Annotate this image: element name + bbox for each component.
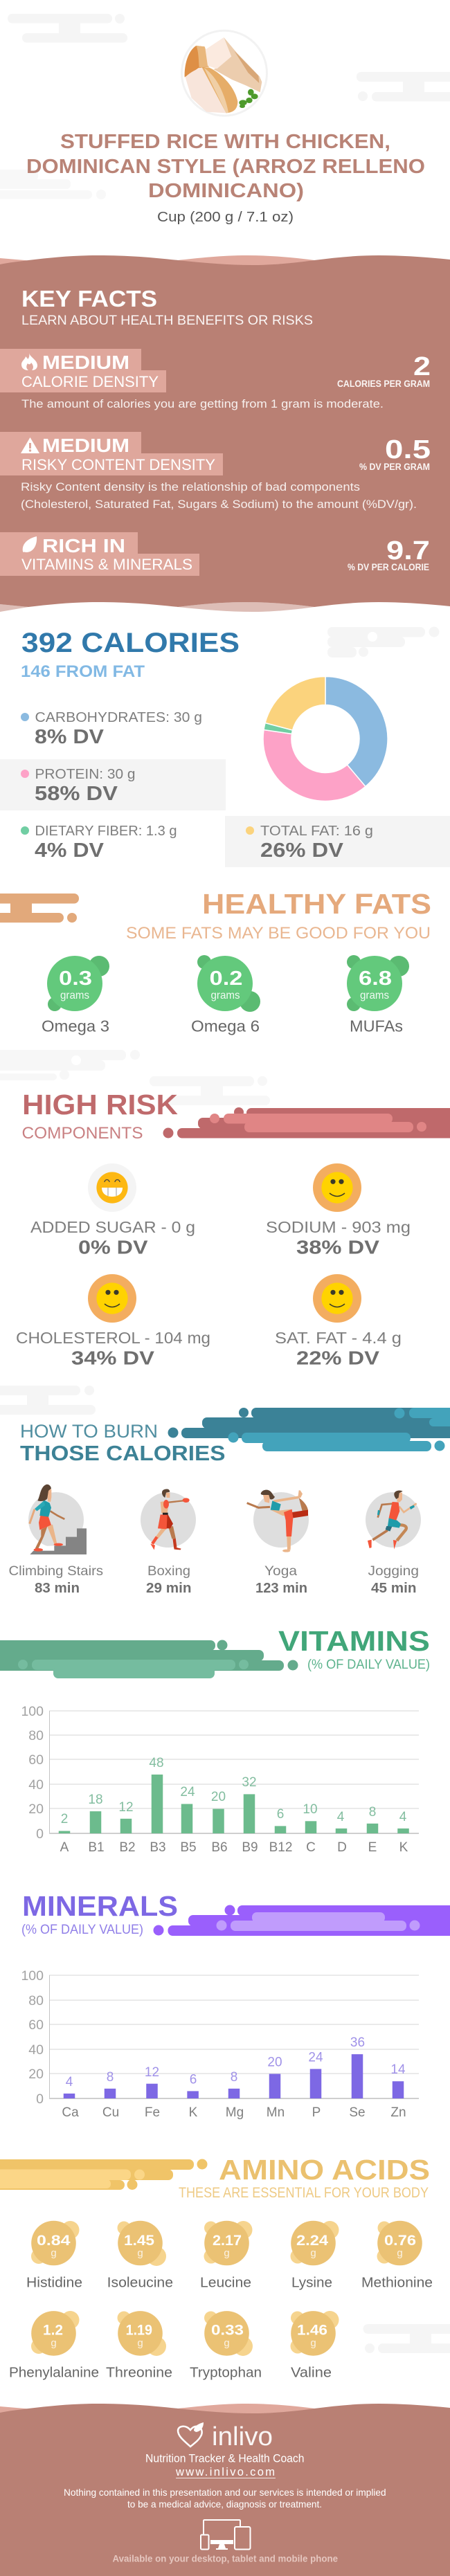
heading: minerals: MINERALS	[22, 1890, 178, 1922]
amino: phenylalanine: Phenylalanine	[9, 2366, 99, 2381]
heading: amino acids	[179, 2154, 430, 2201]
amino: methionine: 0.76	[384, 2232, 416, 2249]
bar chart: vitamins: B12	[269, 1840, 292, 1855]
bar chart: vitamins: 80	[28, 1728, 44, 1743]
bar chart: vitamins: 48	[149, 1756, 164, 1770]
fact: calorie density: The amount of calories you are getting from 1 gram is moderate.	[21, 398, 384, 410]
legend: dietary fiber: 4% DV	[35, 840, 105, 862]
heading: key facts: KEY FACTS	[21, 286, 157, 311]
risk: sodium: SODIUM - 903 mg	[266, 1218, 411, 1236]
bar chart: vitamins: D	[337, 1840, 347, 1855]
bar chart: vitamins: 32	[242, 1775, 257, 1790]
risk: cholesterol: CHOLESTEROL - 104 mg	[16, 1329, 210, 1347]
logo: inlivo: inlivo	[212, 2422, 273, 2451]
bar chart: minerals: Zn	[390, 2105, 406, 2120]
heading: vitamins: (% OF DAILY VALUE)	[307, 1658, 430, 1672]
amino: leucine: 2.17	[213, 2232, 242, 2249]
panel: key facts	[0, 255, 450, 612]
amino: tryptophan: Tryptophan	[190, 2366, 262, 2381]
tagline and website: www.inlivo.com	[175, 2466, 275, 2478]
food photo: chicken	[181, 30, 267, 116]
activity: climbing stairs	[8, 1485, 103, 1596]
bar chart: vitamins: 12	[118, 1800, 134, 1815]
panel: vitamins	[0, 1625, 430, 1855]
icon: leaf	[23, 536, 37, 552]
amino: leucine: g	[224, 2247, 230, 2259]
fact: calorie density: 2	[413, 352, 431, 381]
amino: valine: g	[310, 2337, 316, 2349]
amino: lysine: g	[310, 2247, 316, 2259]
amino: valine: 1.46	[297, 2322, 327, 2339]
icon: flame	[21, 353, 37, 370]
bar chart: minerals	[21, 1968, 419, 2120]
bar chart: minerals: 100	[21, 1968, 44, 1984]
bar chart: minerals: 12	[145, 2065, 159, 2080]
fact: risky content density: MEDIUM	[42, 435, 129, 456]
bar chart: vitamins	[21, 1704, 419, 1855]
bar chart: minerals: Mg	[226, 2105, 244, 2120]
disclaimer	[64, 2487, 386, 2510]
fact: rich in vitamins and minerals: VITAMINS & MINERALS	[21, 556, 192, 573]
bar chart: minerals: Mn	[267, 2105, 285, 2120]
bar chart: vitamins: C	[306, 1840, 316, 1855]
bar chart: vitamins: B2	[119, 1840, 136, 1855]
amino: histidine: Histidine	[26, 2276, 82, 2291]
panel: healthy fats	[0, 888, 431, 1035]
risk: saturated fat: SAT. FAT - 4.4 g	[275, 1329, 402, 1347]
decorative bars: amino acids	[0, 2159, 208, 2190]
disclaimer: Nothing contained in this presentation and our services is intended or implied	[64, 2487, 386, 2498]
bar chart: vitamins: E	[368, 1840, 377, 1855]
activity: jogging: Jogging	[368, 1563, 419, 1579]
badge: omega 3: grams	[60, 990, 89, 1001]
fact: risky content density	[0, 432, 431, 511]
heading: vitamins	[278, 1625, 430, 1672]
bar chart: vitamins: 10	[303, 1802, 318, 1817]
activity: jogging: 45 min	[371, 1581, 417, 1596]
bar chart: vitamins: 2	[61, 1812, 68, 1826]
bar chart: minerals: Ca	[62, 2105, 79, 2120]
bar chart: minerals: Fe	[145, 2105, 160, 2120]
bar chart: vitamins: 0	[36, 1826, 44, 1842]
fact: risky content density: RISKY CONTENT DENSITY	[21, 456, 215, 473]
badge: mufas: MUFAs	[350, 1017, 403, 1035]
badge: omega 3: Omega 3	[42, 1017, 109, 1035]
bar chart: vitamins: 60	[28, 1752, 44, 1768]
amino: histidine: g	[51, 2247, 57, 2259]
heading: amino acids: AMINO ACIDS	[219, 2154, 430, 2186]
bar chart: vitamins: B5	[180, 1840, 197, 1855]
heading: calories: 146 FROM FAT	[21, 662, 145, 681]
bar chart: minerals: 0	[36, 2092, 44, 2107]
fact: calorie density: CALORIE DENSITY	[21, 373, 159, 390]
amino: lysine: Lysine	[291, 2276, 332, 2291]
bar chart: vitamins: 18	[88, 1793, 103, 1807]
heading: key facts: LEARN ABOUT HEALTH BENEFITS OR RISKS	[21, 313, 313, 328]
legend: protein: PROTEIN: 30 g	[35, 766, 136, 782]
title: DOMINICAN STYLE (ARROZ RELLENO	[26, 156, 425, 178]
bar chart: minerals: 14	[390, 2062, 406, 2077]
heading: how to burn: HOW TO BURN	[20, 1421, 158, 1442]
title: DOMINICANO)	[148, 180, 304, 202]
bar chart: vitamins: B3	[150, 1840, 166, 1855]
bar chart: minerals: 6	[190, 2072, 197, 2087]
bar chart: minerals: 8	[107, 2070, 114, 2085]
logo: inlivo	[178, 2422, 273, 2451]
legend: protein: 58% DV	[35, 783, 118, 805]
grey legend backgrounds	[0, 759, 450, 867]
fact: rich in vitamins and minerals: RICH IN	[42, 535, 125, 556]
decorative bars: high risk	[163, 1107, 450, 1138]
bar chart: minerals: 20	[267, 2056, 282, 2069]
amino: leucine: Leucine	[200, 2276, 251, 2291]
activity: boxing	[141, 1489, 196, 1596]
amino: isoleucine	[107, 2221, 173, 2291]
bar chart: minerals: K	[189, 2105, 198, 2120]
amino: phenylalanine: 1.2	[43, 2322, 63, 2339]
heading: healthy fats: SOME FATS MAY BE GOOD FOR YOU	[126, 924, 431, 943]
activity: boxing: Boxing	[147, 1563, 190, 1579]
amino: threonine: 1.19	[126, 2322, 152, 2339]
bar chart: vitamins: 20	[211, 1790, 226, 1804]
decorative bars: vitamins	[0, 1640, 298, 1678]
bar chart: vitamins: 24	[180, 1785, 195, 1799]
bar chart: vitamins: 8	[369, 1805, 376, 1820]
risk: added sugar: ADDED SUGAR - 0 g	[30, 1218, 195, 1236]
bar chart: vitamins: K	[399, 1840, 408, 1855]
bar chart: minerals: 24	[308, 2050, 323, 2065]
legend: total fat: 26% DV	[260, 840, 344, 862]
heading: healthy fats: HEALTHY FATS	[202, 888, 431, 920]
availability note: Available on your desktop, tablet and mobile phone	[112, 2553, 338, 2564]
header panel	[0, 14, 450, 225]
panel: minerals	[21, 1890, 450, 2120]
amino: histidine: 0.84	[37, 2232, 71, 2249]
fact: calorie density: MEDIUM	[42, 352, 129, 373]
amino: threonine: Threonine	[106, 2366, 172, 2381]
tagline and website	[145, 2453, 305, 2478]
badge: mufas: grams	[360, 990, 389, 1001]
bar chart: vitamins: 20	[28, 1802, 44, 1817]
risk: sodium	[266, 1163, 411, 1258]
fact: rich in vitamins and minerals: % DV PER CALORIE	[348, 562, 429, 572]
bar chart: minerals: 60	[28, 2017, 44, 2033]
activity: yoga: Yoga	[264, 1563, 297, 1579]
amino: methionine: Methionine	[361, 2276, 433, 2291]
amino: leucine	[200, 2221, 252, 2291]
bar chart: vitamins: 100	[21, 1704, 44, 1719]
badge: omega 6: Omega 6	[191, 1017, 260, 1035]
legend: carbohydrates: 8% DV	[35, 726, 105, 748]
bar chart: vitamins: B1	[88, 1840, 105, 1855]
badge: omega 6: grams	[210, 990, 240, 1001]
amino: lysine: 2.24	[296, 2232, 328, 2249]
tagline and website: Nutrition Tracker & Health Coach	[145, 2453, 305, 2465]
risk: cholesterol: 34% DV	[71, 1347, 154, 1369]
decorative bars: burn	[168, 1408, 450, 1451]
badge: mufas	[347, 955, 409, 1035]
fact: rich in vitamins and minerals: 9.7	[386, 536, 430, 565]
bar chart: minerals: Cu	[102, 2105, 119, 2120]
bar chart: minerals: 8	[231, 2070, 237, 2085]
legend: dietary fiber	[21, 823, 177, 862]
panel: amino acids	[0, 2154, 450, 2381]
badge: omega 6	[191, 955, 260, 1035]
amino: phenylalanine: g	[51, 2337, 57, 2349]
decorative bars: minerals	[154, 1905, 450, 1936]
heading: high risk: COMPONENTS	[22, 1124, 143, 1143]
serving size: Cup (200 g / 7.1 oz)	[157, 210, 294, 225]
donut chart	[263, 677, 388, 801]
heading: key facts	[21, 286, 313, 328]
bar chart: vitamins: 4	[399, 1810, 407, 1824]
risk: saturated fat	[275, 1274, 402, 1369]
fact: risky content density: Risky Content density is the relationship of bad components	[21, 481, 360, 493]
fact: risky content density: 0.5	[385, 435, 431, 464]
heading: vitamins: VITAMINS	[278, 1625, 430, 1657]
heading: minerals	[21, 1890, 178, 1937]
bar chart: vitamins: A	[60, 1840, 69, 1855]
legend: total fat	[246, 823, 373, 862]
badge: omega 3	[42, 956, 109, 1035]
risk: sodium: 38% DV	[296, 1236, 379, 1258]
heading: minerals: (% OF DAILY VALUE)	[21, 1923, 143, 1937]
amino: valine	[291, 2311, 339, 2381]
amino: phenylalanine	[9, 2311, 99, 2381]
amino: tryptophan: 0.33	[211, 2322, 244, 2339]
activity: jogging	[366, 1490, 421, 1596]
amino: isoleucine: Isoleucine	[107, 2276, 173, 2291]
risk: added sugar	[30, 1163, 195, 1258]
fact: calorie density: CALORIES PER GRAM	[337, 379, 430, 389]
bar chart: minerals: 20	[28, 2067, 44, 2082]
heading: calories: 392 CALORIES	[21, 628, 240, 658]
fact: calorie density	[0, 349, 431, 410]
panel: high risk components	[0, 1050, 450, 1369]
amino: isoleucine: 1.45	[124, 2232, 154, 2249]
panel: footer	[0, 2404, 450, 2576]
legend: carbohydrates: CARBOHYDRATES: 30 g	[35, 709, 202, 725]
fact: risky content density: % DV PER GRAM	[359, 462, 430, 472]
risk: saturated fat: 22% DV	[296, 1347, 379, 1369]
heading: high risk	[22, 1089, 178, 1143]
activity: yoga	[247, 1490, 309, 1596]
bar chart: minerals: 80	[28, 1993, 44, 2008]
amino: lysine	[291, 2221, 339, 2291]
disclaimer: to be a medical advice, diagnosis or treatment.	[127, 2498, 322, 2510]
amino: isoleucine: g	[137, 2247, 143, 2259]
icon: devices	[201, 2520, 251, 2550]
heading: high risk: HIGH RISK	[22, 1089, 178, 1121]
badge: omega 3: 0.3	[59, 968, 92, 990]
legend: protein	[21, 766, 136, 805]
bar chart: minerals: 40	[28, 2042, 44, 2058]
amino: methionine	[361, 2221, 433, 2291]
heading: calories	[21, 628, 240, 681]
heading: healthy fats	[126, 888, 431, 943]
legend: dietary fiber: DIETARY FIBER: 1.3 g	[35, 823, 177, 839]
legend: total fat: TOTAL FAT: 16 g	[260, 823, 373, 839]
heading: how to burn: THOSE CALORIES	[20, 1441, 226, 1465]
legend: carbohydrates	[21, 709, 202, 748]
activity: yoga: 123 min	[255, 1581, 307, 1596]
fact: rich in vitamins and minerals	[0, 532, 430, 576]
bar chart: minerals: 36	[350, 2035, 365, 2050]
bar chart: vitamins: B6	[211, 1840, 228, 1855]
bar chart: minerals: Se	[349, 2105, 366, 2120]
amino: tryptophan: g	[224, 2337, 230, 2349]
title: STUFFED RICE WITH CHICKEN,	[60, 131, 390, 153]
bar chart: minerals: 4	[66, 2075, 73, 2089]
panel: calories and macronutrients	[0, 627, 450, 867]
bar chart: vitamins: B9	[242, 1840, 258, 1855]
amino: histidine	[26, 2221, 82, 2291]
bar chart: vitamins: 4	[337, 1810, 345, 1824]
risk: added sugar: 0% DV	[78, 1236, 148, 1258]
bar chart: vitamins: 6	[277, 1807, 284, 1822]
icon: warning triangle	[21, 437, 39, 453]
badge: omega 6: 0.2	[209, 968, 242, 990]
activity: climbing stairs: 83 min	[35, 1581, 80, 1596]
amino: threonine	[106, 2311, 172, 2381]
activity: climbing stairs: Climbing Stairs	[8, 1563, 103, 1579]
activity: boxing: 29 min	[146, 1581, 191, 1596]
badge: mufas: 6.8	[359, 968, 392, 990]
amino: threonine: g	[137, 2337, 143, 2349]
heading: how to burn	[20, 1421, 226, 1465]
risk: cholesterol	[16, 1274, 210, 1369]
title	[26, 131, 425, 202]
amino: tryptophan	[190, 2311, 262, 2381]
panel: burn calories	[0, 1386, 450, 1596]
fact: risky content density: (Cholesterol, Saturated Fat, Sugars & Sodium) to the amount (%DV/gr).	[21, 498, 417, 511]
bar chart: minerals: P	[312, 2105, 321, 2120]
bar chart: vitamins: 40	[28, 1777, 44, 1793]
amino: valine: Valine	[291, 2366, 332, 2381]
amino: methionine: g	[397, 2247, 403, 2259]
